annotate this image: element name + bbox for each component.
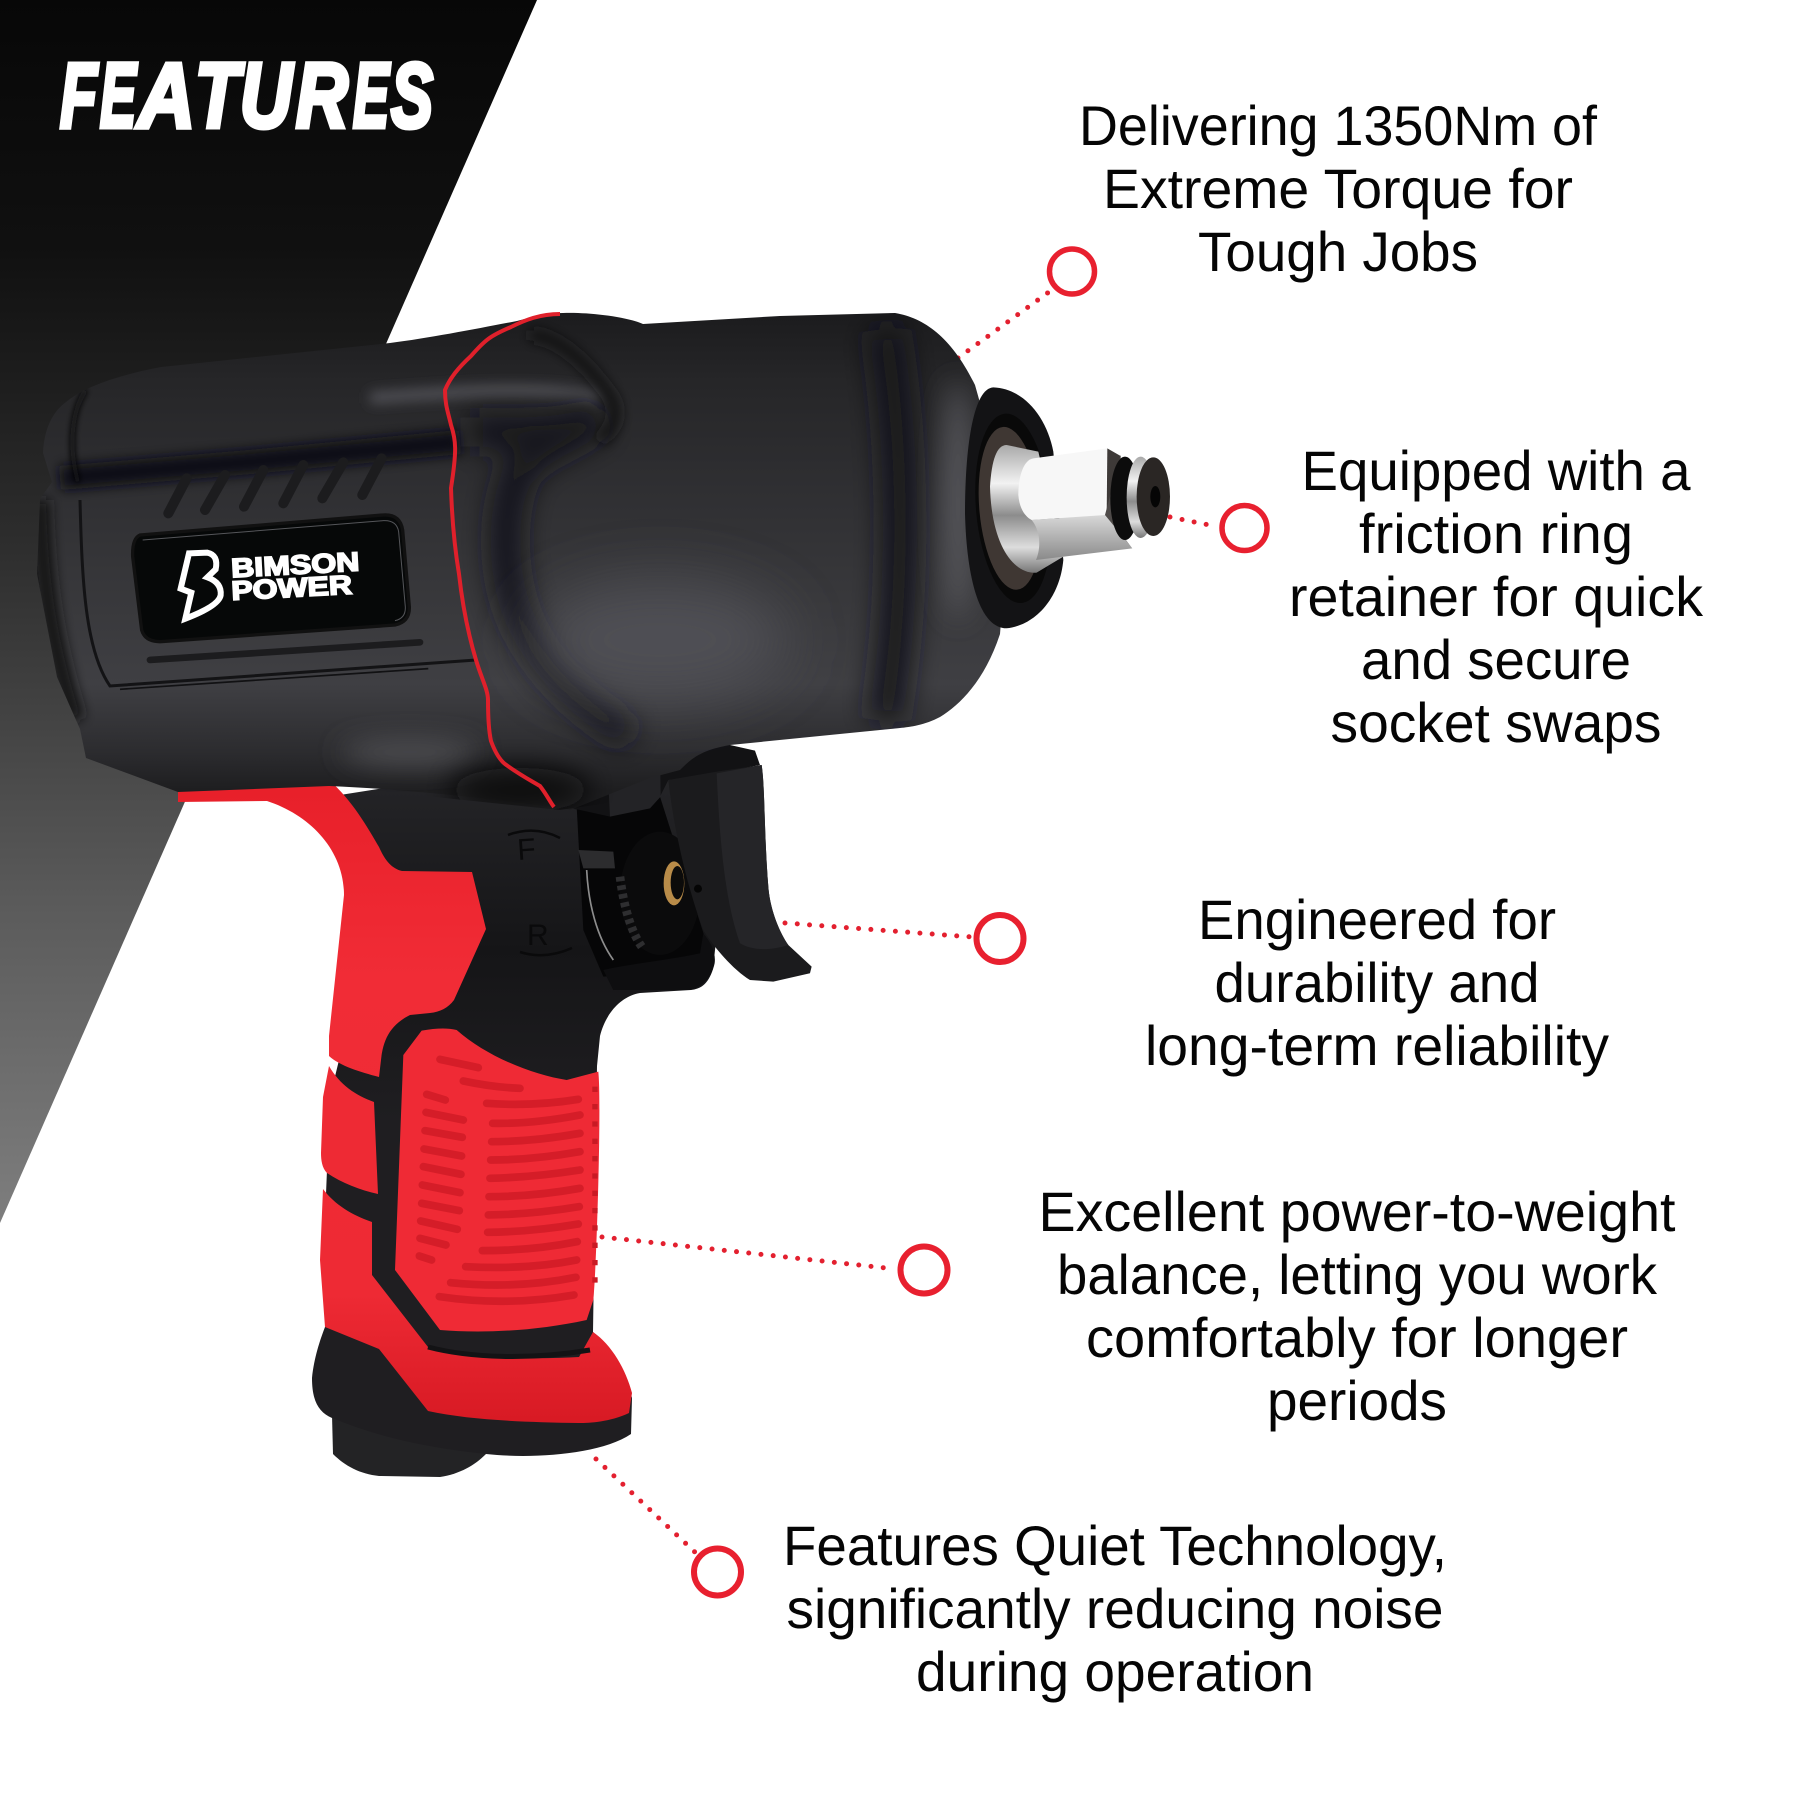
text: durability: long-term reliability (1145, 1015, 1609, 1077)
handle direction markings F and R: R (527, 919, 549, 952)
title: E (353, 45, 391, 147)
front textured grip (395, 1028, 599, 1331)
text: balance: periods (1267, 1370, 1447, 1432)
callout connector: balance (602, 1237, 948, 1294)
text: durability (1145, 889, 1609, 1077)
handle direction markings F and R (508, 831, 572, 955)
upper red grip (178, 780, 486, 1077)
diagonal gradient panel (0, 0, 537, 1223)
nose and drive anvil (965, 387, 1170, 628)
title: F (60, 45, 99, 147)
impact wrench product illustration (37, 313, 1170, 1477)
text: quiet (783, 1515, 1447, 1703)
text: retainer: friction ring (1359, 503, 1633, 565)
body shading highlights (40, 330, 972, 812)
brand wordmark (229, 547, 361, 606)
side red pad upper (321, 1066, 378, 1194)
text: balance (1038, 1181, 1676, 1432)
brand wordmark: POWER (231, 570, 353, 606)
text: torque: Extreme Torque for (1103, 158, 1573, 220)
bearing (968, 410, 1059, 606)
title (60, 45, 433, 147)
callout connector: quiet (596, 1459, 741, 1596)
callout connector: retainer (1170, 506, 1267, 550)
text: balance: balance, letting you work (1057, 1244, 1657, 1306)
text: retainer: and secure (1361, 629, 1631, 691)
text: retainer: Equipped with a (1302, 440, 1691, 502)
text: quiet: Features Quiet Technology, (783, 1515, 1447, 1577)
square drive (1018, 448, 1107, 520)
callout connector: torque (958, 249, 1094, 358)
text: durability: durability and (1214, 952, 1540, 1014)
logo badge (133, 515, 409, 642)
text: quiet: significantly reducing noise (786, 1578, 1444, 1640)
callout connector: durability (785, 915, 1024, 962)
air inlet plug (332, 1415, 486, 1477)
text: torque: Delivering 1350Nm of (1079, 95, 1598, 157)
ventilation slots (168, 458, 382, 513)
handle direction markings F and R: F (516, 833, 537, 867)
title: U (240, 45, 294, 147)
text: retainer (1289, 440, 1703, 754)
logo mark (181, 553, 221, 619)
handle black moulding (312, 760, 735, 1456)
text: balance: comfortably for longer (1086, 1307, 1628, 1369)
text: retainer: socket swaps (1330, 692, 1662, 754)
main housing body (37, 313, 1010, 810)
title: A (136, 45, 195, 147)
title: T (195, 45, 244, 147)
text: quiet: during operation (916, 1641, 1314, 1703)
drive shaft base (990, 445, 1063, 573)
red accent seam (445, 314, 560, 807)
text: durability: Engineered for (1198, 889, 1556, 951)
text: torque: Tough Jobs (1198, 221, 1478, 283)
title: S (391, 45, 433, 147)
moulded lines beneath badge (120, 642, 428, 689)
text: retainer: retainer for quick (1289, 566, 1703, 628)
nose ring (965, 387, 1063, 628)
trigger assembly (560, 730, 812, 990)
title: R (296, 45, 348, 147)
text: balance: Excellent power-to-weight (1038, 1181, 1676, 1243)
brand wordmark: BIMSON (230, 547, 360, 583)
text: torque (1079, 95, 1598, 283)
title: E (100, 45, 138, 147)
anvil end face (1137, 457, 1170, 536)
black base band detail (428, 1347, 590, 1356)
side red pad lower and base (320, 1189, 632, 1423)
retainer ring (1110, 457, 1140, 540)
